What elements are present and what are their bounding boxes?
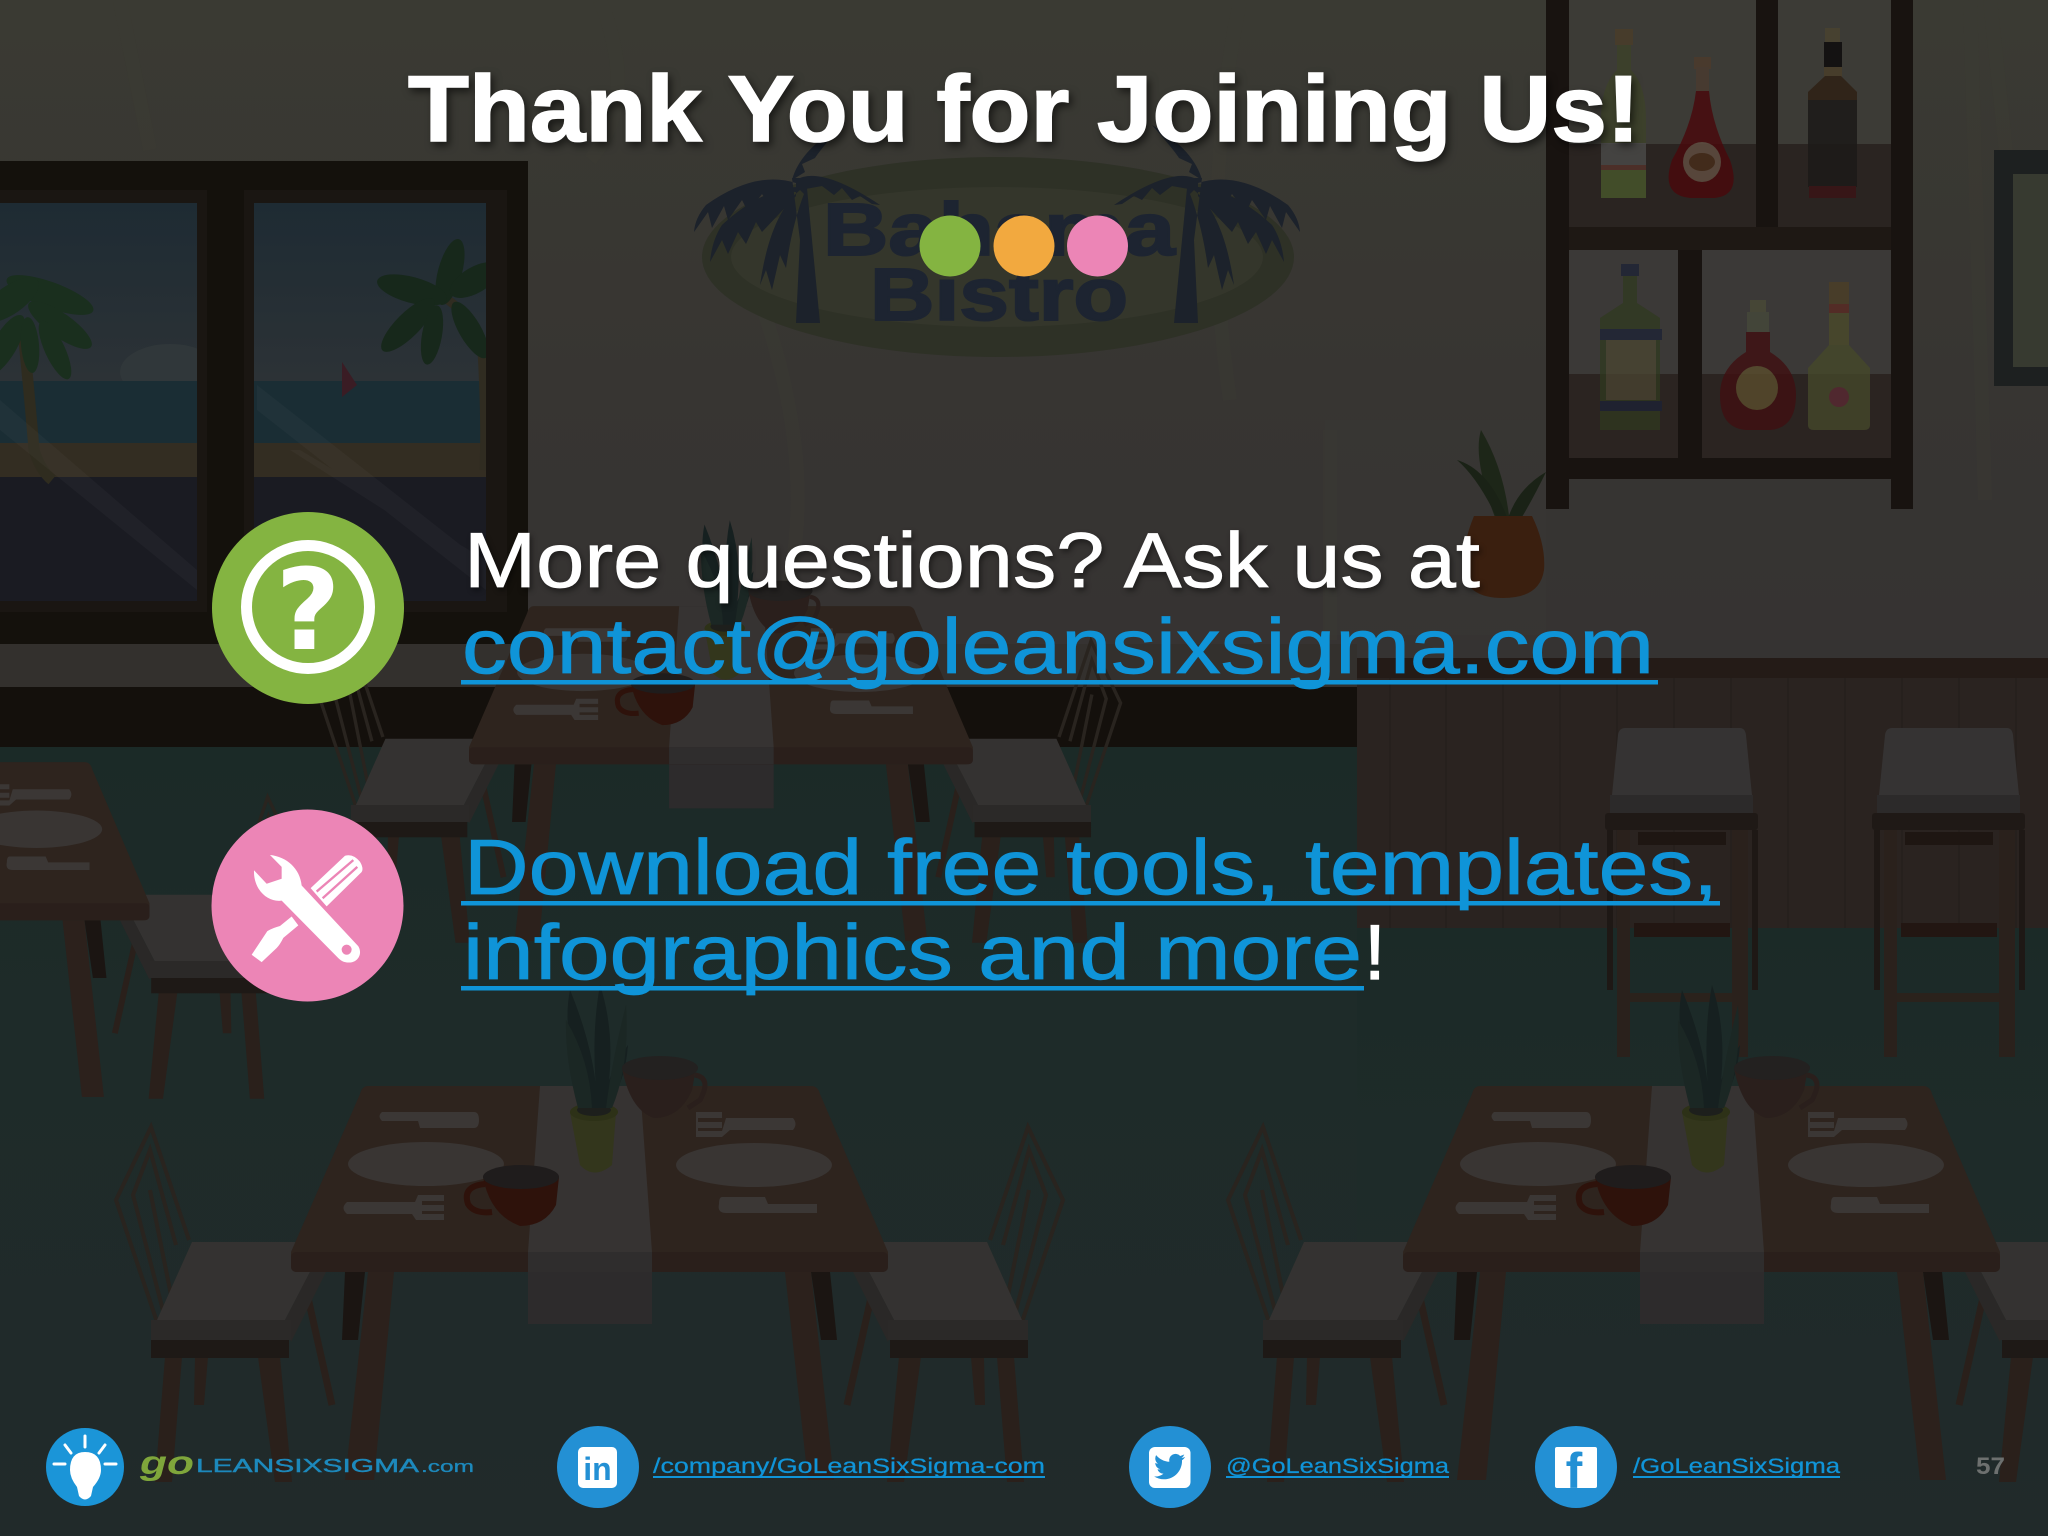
window with beach view — [0, 161, 528, 644]
bottle shelf — [1546, 0, 1913, 509]
bar counter — [1357, 640, 2048, 928]
sign text — [823, 188, 1176, 336]
page number: 57 — [1976, 1453, 2005, 1480]
icon: twitter — [1129, 1426, 1211, 1508]
contact text block — [461, 516, 1658, 690]
icon: light bulb — [46, 1428, 124, 1506]
bottle: green with navy bands — [1600, 264, 1662, 430]
sign text: Bistro — [870, 253, 1128, 336]
front-right table — [1228, 985, 2048, 1482]
middle back table — [321, 520, 1121, 943]
download link — [461, 823, 1720, 996]
bottle: red round — [1720, 300, 1796, 430]
footer — [46, 1426, 2005, 1508]
wall — [0, 0, 2048, 760]
icon: question mark — [212, 512, 404, 704]
twitter handle: @GoLeanSixSigma — [1226, 1455, 1449, 1478]
restaurant sign — [694, 125, 1300, 357]
logo wordmark: LEANSIXSIGMA — [196, 1456, 419, 1476]
email link: contact@goleansixsigma.com — [462, 602, 1654, 690]
window sill and dark band — [0, 644, 1357, 687]
front-left table — [116, 985, 1063, 1482]
bottle: yellow — [1808, 282, 1870, 430]
counter plant — [1457, 430, 1546, 598]
icon: facebook — [1535, 1426, 1617, 1508]
bottle: green wine — [1601, 29, 1646, 198]
download link: infographics and more — [463, 908, 1362, 996]
three coloured dots — [920, 216, 1128, 276]
question line: More questions? Ask us at — [464, 516, 1480, 604]
linkedin handle: /company/GoLeanSixSigma-com — [653, 1455, 1045, 1478]
icon: wrench and screwdriver — [212, 810, 404, 1002]
logo wordmark: go — [139, 1444, 194, 1481]
icon: linkedin: in — [583, 1451, 612, 1487]
icon: question mark: ? — [276, 546, 340, 676]
facebook handle: /GoLeanSixSigma — [1633, 1455, 1840, 1478]
logo wordmark — [139, 1444, 474, 1481]
logo wordmark: .com — [421, 1457, 474, 1476]
bottle: dark — [1808, 28, 1857, 198]
bottle: red — [1669, 57, 1734, 198]
floor — [0, 747, 1357, 1536]
sign text: Bahama — [823, 188, 1176, 271]
icon: linkedin — [557, 1426, 639, 1508]
stools — [1605, 728, 2025, 1057]
wall picture frame — [1994, 150, 2048, 386]
download text block — [461, 823, 1720, 996]
far-left table — [0, 676, 297, 1099]
logo — [46, 1428, 474, 1506]
icon: facebook: f — [1566, 1443, 1583, 1499]
download link: Download free tools, templates, — [464, 823, 1718, 911]
title: Thank You for Joining Us! — [408, 56, 1640, 161]
exclamation mark: ! — [1364, 908, 1386, 996]
